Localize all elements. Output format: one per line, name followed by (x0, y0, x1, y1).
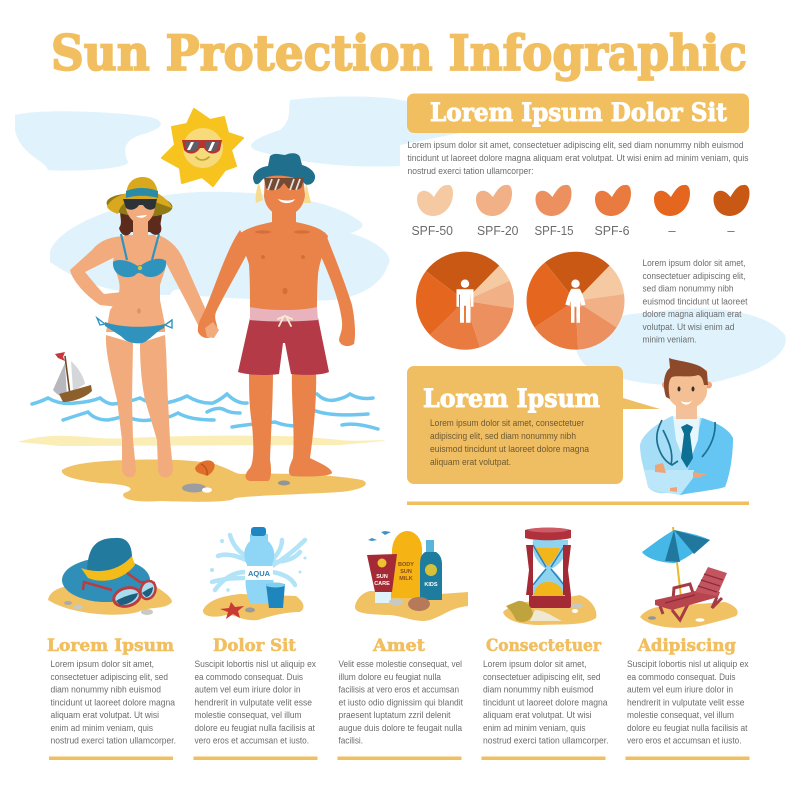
icon: male figure (456, 280, 474, 323)
icon: unrated swatch B (714, 185, 750, 216)
doctor: smile (681, 400, 692, 405)
woman: sunglasses (123, 199, 157, 210)
icon: sunscreen bottles: CARE (374, 581, 390, 587)
woman: hair (119, 205, 162, 235)
SPF labels: – (668, 223, 676, 238)
man: blond hair (256, 182, 311, 203)
SPF skin tone scale (412, 185, 750, 238)
title: Sun Protection Infographic (51, 24, 747, 82)
column 1 heading: Lorem Ipsum (47, 636, 174, 656)
icon: hat and sunglasses on sand (48, 538, 172, 615)
callout: doctor speech bubble (407, 366, 660, 484)
side paragraph: volutpat. Ut wisi enim ad (642, 322, 734, 332)
column 2 heading: Dolor Sit (213, 636, 296, 656)
callout text (430, 418, 589, 467)
doctor: crossed sleeve (644, 470, 694, 495)
illustration: woman in bikini (70, 177, 208, 478)
doctor: neck (676, 405, 697, 419)
man: right arm (318, 232, 355, 346)
icon: SPF-15 swatch (536, 185, 572, 216)
side paragraph: dolore magna aliquam erat (642, 309, 742, 319)
woman: smile (136, 215, 147, 218)
icon: umbrella and deck chair (640, 527, 738, 628)
man: shorts (238, 318, 329, 375)
icon: sunscreen bottles: SUN (400, 569, 412, 575)
column 2 text: vero eros et accumsan et iusto. (194, 736, 309, 746)
column 1: Lorem Ipsum (47, 636, 176, 760)
icon: sunscreen bottles: KIDS (424, 582, 438, 588)
callout text: adipiscing elit, sed diam nonummy nibh (430, 431, 576, 441)
column 5: Adipiscing (626, 636, 750, 760)
woman: navel (137, 308, 141, 314)
column 1 text: nostrud exerci tation ullamcorper. (50, 736, 176, 746)
column 4 text: enim ad minim veniam, quis (483, 723, 586, 733)
callout heading: Lorem Ipsum (423, 384, 600, 413)
SPF labels: – (727, 223, 735, 238)
intro paragraph: Lorem ipsum dolor sit amet, consectetuer adipiscing elit, sed diam nonummy nibh euismod (408, 140, 744, 150)
column 2 text: dolore eu feugiat nulla facilisis at (194, 723, 315, 733)
woman: bikini top (113, 259, 166, 277)
column 5 heading: Adipiscing (637, 636, 736, 656)
header banner: Lorem Ipsum Dolor Sit (430, 98, 727, 127)
illustration: pale sand strip (18, 436, 385, 446)
background clouds (15, 97, 786, 385)
doctor: ears (662, 382, 669, 388)
icon: SPF-50 swatch (417, 185, 453, 216)
illustration: sea waves (32, 394, 378, 429)
column 4 text: consectetuer adipiscing elit, sed (483, 672, 600, 682)
icon: sunscreen bottles (355, 531, 468, 621)
icon: sunscreen bottles: SUN (376, 574, 388, 580)
side paragraph: consectetuer adipiscing elit, (642, 271, 746, 281)
column 3 text: augue duis dolore te feugait nulla (338, 723, 462, 733)
column 5 text: molestie consequat, vel illum (627, 710, 734, 720)
woman: hat brim (106, 191, 173, 219)
column 3 heading: Amet (372, 636, 425, 656)
man: chest details (255, 230, 310, 294)
column 1 text: enim ad minim veniam, quis (50, 723, 153, 733)
column 4 text (483, 659, 608, 746)
SPF labels: SPF-15 (534, 223, 574, 238)
column 1 text: consectetuer adipiscing elit, sed (50, 672, 168, 682)
column 4 text: diam nonummy nibh euismod (483, 684, 594, 694)
column 3 rule (338, 756, 462, 760)
doctor: stethoscope (657, 420, 715, 465)
column 5 text: autem vel eum iriure dolor in (627, 684, 733, 694)
column 2 text: ea commodo consequat. Duis (194, 672, 303, 682)
column 1 text: tincidunt ut laoreet dolore magna (50, 698, 175, 708)
column 5 text (627, 659, 749, 746)
icon: water bottle with splash: AQUA (248, 569, 271, 578)
icon: sunscreen bottles: MILK (399, 576, 413, 582)
SPF labels: SPF-20 (477, 223, 518, 238)
icon: hourglass (503, 528, 596, 625)
man: sunglasses (264, 178, 304, 190)
icon: unrated swatch A (654, 185, 690, 216)
column 3 text: facilisi. (338, 736, 363, 746)
woman: left arm on hip (70, 236, 128, 307)
column 3 text: et iusto odio dignissim qui blandit (338, 698, 463, 708)
woman: bikini bottom (105, 322, 165, 343)
icon: water bottle with splash (203, 527, 306, 620)
column 2 rule (194, 756, 318, 760)
side paragraph: sed diam nonummy nibh (642, 284, 734, 294)
doctor: coat (640, 416, 733, 495)
intro paragraph: nostrud exerci tation ullamcorper: (408, 166, 534, 176)
divider under callout (407, 502, 749, 505)
column 5 text: Suscipit lobortis nisl ut aliquip ex (627, 659, 749, 669)
pie chart: male (416, 252, 514, 350)
illustration: doctor (640, 358, 733, 495)
column 1 text: aliquam erat volutpat. Ut wisi (50, 710, 159, 720)
woman: neck (133, 220, 148, 237)
column 2 text: hendrerit in vulputate velit esse (194, 698, 312, 708)
man: hat (253, 153, 315, 185)
woman: legs (106, 335, 136, 478)
clasped hand: woman's fingers (205, 322, 219, 338)
man: legs (246, 370, 273, 481)
SPF labels: SPF-6 (594, 223, 630, 238)
doctor: tie (681, 424, 693, 468)
icon: sunscreen bottles: BODY (398, 562, 414, 568)
icon: female figure (566, 280, 586, 323)
column 4 rule (482, 756, 606, 760)
doctor: face (667, 370, 707, 409)
illustration: sailboat (53, 352, 92, 402)
side paragraph: euismod tincidunt ut laoreet (642, 296, 748, 306)
doctor: hands (655, 463, 707, 492)
column 4 text: tincidunt ut laoreet dolore magna (483, 698, 608, 708)
intro paragraph: tincidunt ut laoreet dolore magna aliquam erat volutpat. Ut wisi enim ad minim veniam, quis (408, 153, 749, 163)
column 5 text: vero eros et accumsan et iusto. (627, 736, 742, 746)
doctor: eyes (678, 386, 680, 392)
column 3 text: illum dolore eu feugiat nulla (338, 672, 441, 682)
column 4 heading: Consectetuer (486, 636, 602, 656)
man: face (264, 174, 305, 216)
icon: SPF-20 swatch (476, 185, 512, 216)
side paragraph (642, 258, 748, 344)
callout text: Lorem ipsum dolor sit amet, consectetuer (430, 418, 584, 428)
column 4: Consectetuer (482, 636, 608, 760)
man: waistband (250, 307, 318, 322)
column 3 text: Velit esse molestie consequat, vel (338, 659, 462, 669)
column 1 rule (49, 756, 173, 760)
column 2 text: autem vel eum iriure dolor in (194, 684, 300, 694)
column 2 text: Suscipit lobortis nisl ut aliquip ex (194, 659, 316, 669)
woman: hat crown (126, 177, 158, 197)
column 5 text: hendrerit in vulputate velit esse (627, 698, 744, 708)
column 1 text: diam nonummy nibh euismod (50, 684, 161, 694)
column 5 text: dolore eu feugiat nulla facilisis at (627, 723, 748, 733)
callout text: euismod tincidunt ut laoreet dolore magna (430, 444, 589, 454)
column 1 text: Lorem ipsum dolor sit amet, (50, 659, 154, 669)
man: drawstring (278, 316, 292, 326)
column 1 text (50, 659, 176, 746)
side paragraph: Lorem ipsum dolor sit amet, (642, 258, 746, 268)
callout text: aliquam erat volutpat. (430, 457, 511, 467)
man: smile (278, 199, 295, 203)
doctor: shirt (673, 416, 700, 468)
column 2 text (194, 659, 316, 746)
illustration: beach stones and shell (182, 460, 290, 493)
doctor: hair (664, 358, 708, 399)
pie chart: female (527, 252, 624, 350)
column 4 text: nostrud exerci tation ullamcorper. (483, 736, 608, 746)
column 3: Amet (338, 636, 463, 760)
illustration: man in shorts (198, 153, 355, 481)
intro paragraph (408, 140, 749, 176)
column 2 text: molestie consequat, vel illum (194, 710, 302, 720)
SPF labels: SPF-50 (412, 223, 453, 238)
column 4 text: Lorem ipsum dolor sit amet, (483, 659, 586, 669)
illustration: sand patch under couple (62, 459, 366, 502)
column 5 text: ea commodo consequat. Duis (627, 672, 736, 682)
woman: torso (106, 235, 167, 332)
column 2: Dolor Sit (194, 636, 318, 760)
man: torso (237, 212, 328, 312)
woman: right arm (158, 235, 208, 325)
column 3 text: praesent luptatum zzril delenit (338, 710, 451, 720)
illustration: sun with sunglasses (162, 109, 243, 186)
column 3 text (338, 659, 463, 746)
column 4 text: aliquam erat volutpat. Ut wisi (483, 710, 592, 720)
woman: face (125, 200, 155, 225)
icon: SPF-6 swatch (595, 185, 631, 216)
column 3 text: facilisis at vero eros et accumsan (338, 684, 459, 694)
SPF labels (412, 223, 735, 238)
side paragraph: minim veniam. (642, 334, 696, 344)
man: left arm (198, 230, 250, 338)
header banner (407, 94, 749, 133)
column 5 rule (626, 756, 750, 760)
